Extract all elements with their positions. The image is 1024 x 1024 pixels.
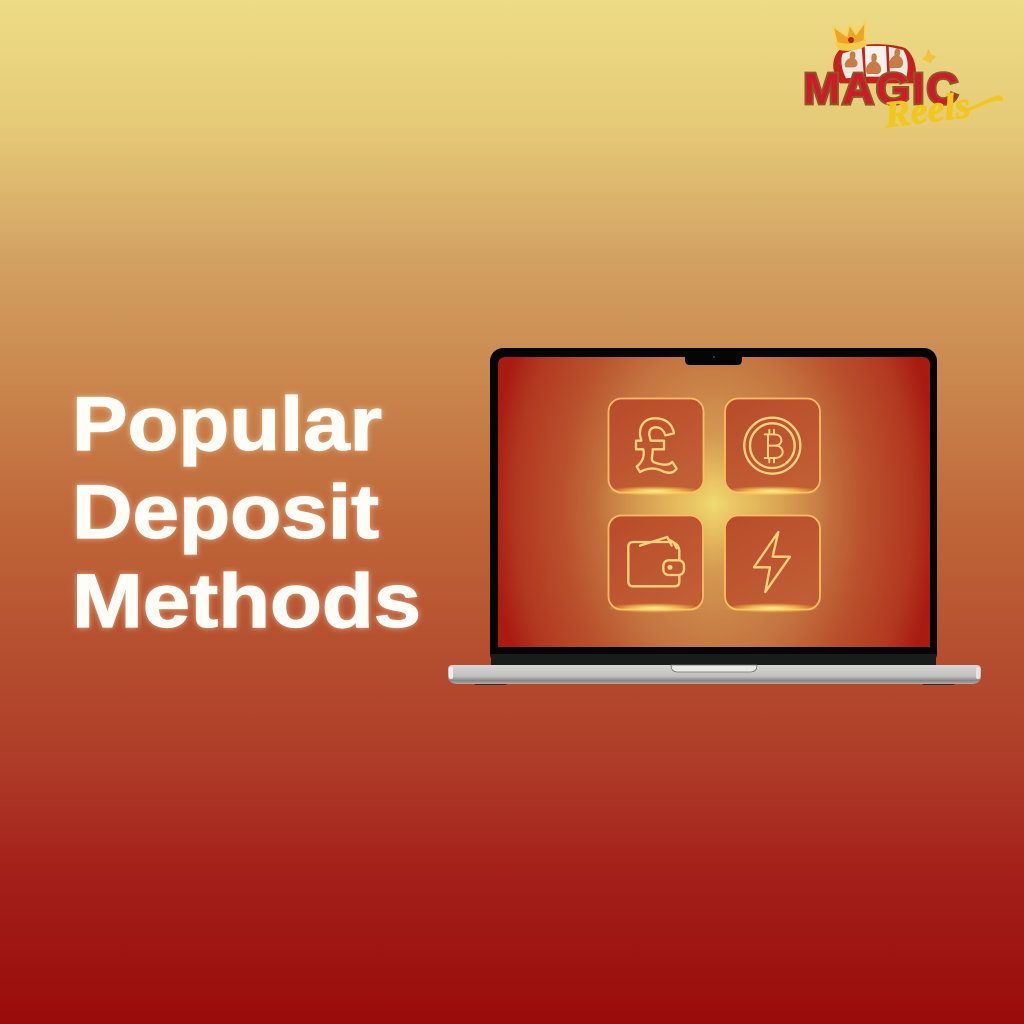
star sparkle — [922, 49, 937, 63]
icon: lightning bolt — [754, 532, 790, 592]
MAGIC wordmark: MAGIC — [803, 64, 958, 113]
card: wallet — [607, 516, 703, 613]
card: bitcoin — [724, 398, 820, 496]
icon: bitcoin — [744, 418, 800, 474]
card: lightning — [724, 516, 820, 613]
title: Popular Deposit Methods: Methods — [72, 559, 421, 644]
title: Popular Deposit Methods: Deposit — [72, 470, 379, 555]
title: Popular Deposit Methods: Methods — [72, 559, 421, 644]
laptop — [448, 348, 981, 685]
slot machine reels — [833, 44, 916, 83]
crown — [833, 21, 867, 51]
laptop chin — [491, 654, 936, 666]
icon: pound sign — [636, 418, 677, 473]
feet — [474, 681, 507, 685]
opening notch — [671, 665, 757, 672]
icon grid — [594, 389, 834, 619]
logo: Magic Reels — [803, 21, 1003, 136]
icon: wallet — [628, 537, 684, 586]
base body — [448, 665, 981, 684]
laptop base — [448, 665, 981, 685]
title: Popular Deposit Methods: Deposit — [72, 470, 379, 555]
laptop lid — [490, 348, 937, 666]
Reels script: Reels — [881, 85, 972, 136]
card: pound — [607, 398, 704, 496]
central glow — [594, 389, 834, 619]
title: Popular Deposit Methods: Popular — [72, 382, 382, 467]
title: Popular Deposit Methods: Popular — [72, 382, 382, 467]
icon glyphs — [628, 418, 800, 592]
camera — [713, 356, 715, 358]
title: Popular Deposit Methods — [72, 382, 421, 644]
laptop screen — [498, 357, 930, 647]
